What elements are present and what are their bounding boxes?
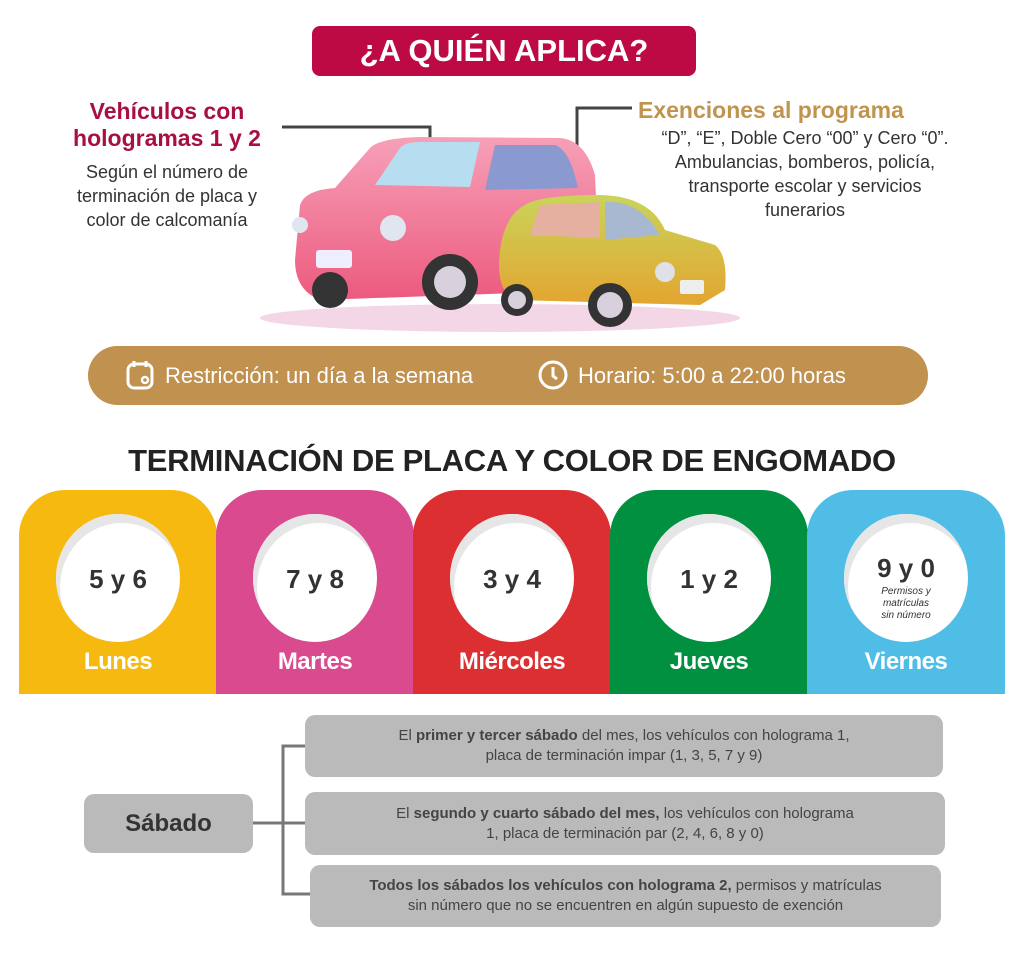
card: Jueves <box>610 490 808 694</box>
text: hologramas: Según el número de <box>86 162 248 182</box>
card: Jueves: Jueves <box>670 648 748 675</box>
box: all saturdays <box>310 865 941 927</box>
card: Viernes: Permisos y <box>881 586 931 597</box>
card: Jueves: 1 y 2 <box>680 564 738 594</box>
card: Miércoles: 3 y 4 <box>483 564 541 594</box>
label: Sábado: Sábado <box>125 810 212 836</box>
text: restriction: Restricción: un día a la semana <box>165 363 473 388</box>
card: Martes <box>216 490 414 694</box>
box: first/third saturday: El primer y tercer sábado del mes, los vehículos con holograma 1, <box>398 727 850 744</box>
text: schedule: Horario: 5:00 a 22:00 horas <box>578 363 846 388</box>
title: ¿A QUIÉN APLICA? <box>360 33 648 68</box>
icon: clock <box>538 360 568 390</box>
text: hologramas <box>77 162 257 230</box>
info bar: restriction & schedule <box>88 346 928 405</box>
label: Sábado <box>84 794 253 853</box>
heading: hologramas: hologramas 1 y 2 <box>73 125 261 151</box>
section heading: TERMINACIÓN DE PLACA Y COLOR DE ENGOMADO <box>128 443 896 478</box>
heading: hologramas <box>73 98 261 151</box>
card: Lunes: 5 y 6 <box>89 564 147 594</box>
card: Miércoles: Miércoles <box>459 648 565 675</box>
heading: hologramas: Vehículos con <box>90 98 244 124</box>
text: hologramas: terminación de placa y <box>77 186 257 206</box>
box: second/fourth saturday: 1, placa de terminación par (2, 4, 6, 8 y 0) <box>486 824 764 842</box>
card: Lunes: Lunes <box>84 648 152 675</box>
box: all saturdays: Todos los sábados los vehículos con holograma 2, permisos y matrículas <box>369 877 882 894</box>
card: Viernes <box>807 490 1005 694</box>
card: Viernes: matrículas <box>883 598 929 609</box>
box: first/third saturday: placa de terminación impar (1, 3, 5, 7 y 9) <box>486 747 762 764</box>
card: Lunes <box>19 490 217 694</box>
box: first/third saturday <box>305 715 943 777</box>
box: second/fourth saturday <box>305 792 945 855</box>
card: Viernes: 9 y 0 <box>877 553 935 583</box>
text: exenciones: “D”, “E”, Doble Cero “00” y Cero “0”. <box>661 128 949 148</box>
box: second/fourth saturday: El segundo y cuarto sábado del mes, los vehículos con holograma <box>396 804 854 822</box>
text: exenciones: funerarios <box>765 200 845 220</box>
heading: exenciones: Exenciones al programa <box>638 97 904 123</box>
card: Viernes: Viernes <box>865 648 947 675</box>
card: Martes: Martes <box>278 648 352 675</box>
box: all saturdays: sin número que no se encuentren en algún supuesto de exención <box>408 897 843 914</box>
card: Miércoles <box>413 490 611 694</box>
icon: calendar <box>126 361 154 390</box>
illustration: cars <box>260 137 740 332</box>
text: exenciones <box>661 128 949 220</box>
text: exenciones: transporte escolar y servicios <box>688 176 922 196</box>
card: Viernes: sin número <box>881 610 931 621</box>
text: exenciones: Ambulancias, bomberos, policía, <box>675 152 935 172</box>
title <box>312 26 696 76</box>
card: Martes: 7 y 8 <box>286 564 344 594</box>
text: hologramas: color de calcomanía <box>86 210 248 230</box>
